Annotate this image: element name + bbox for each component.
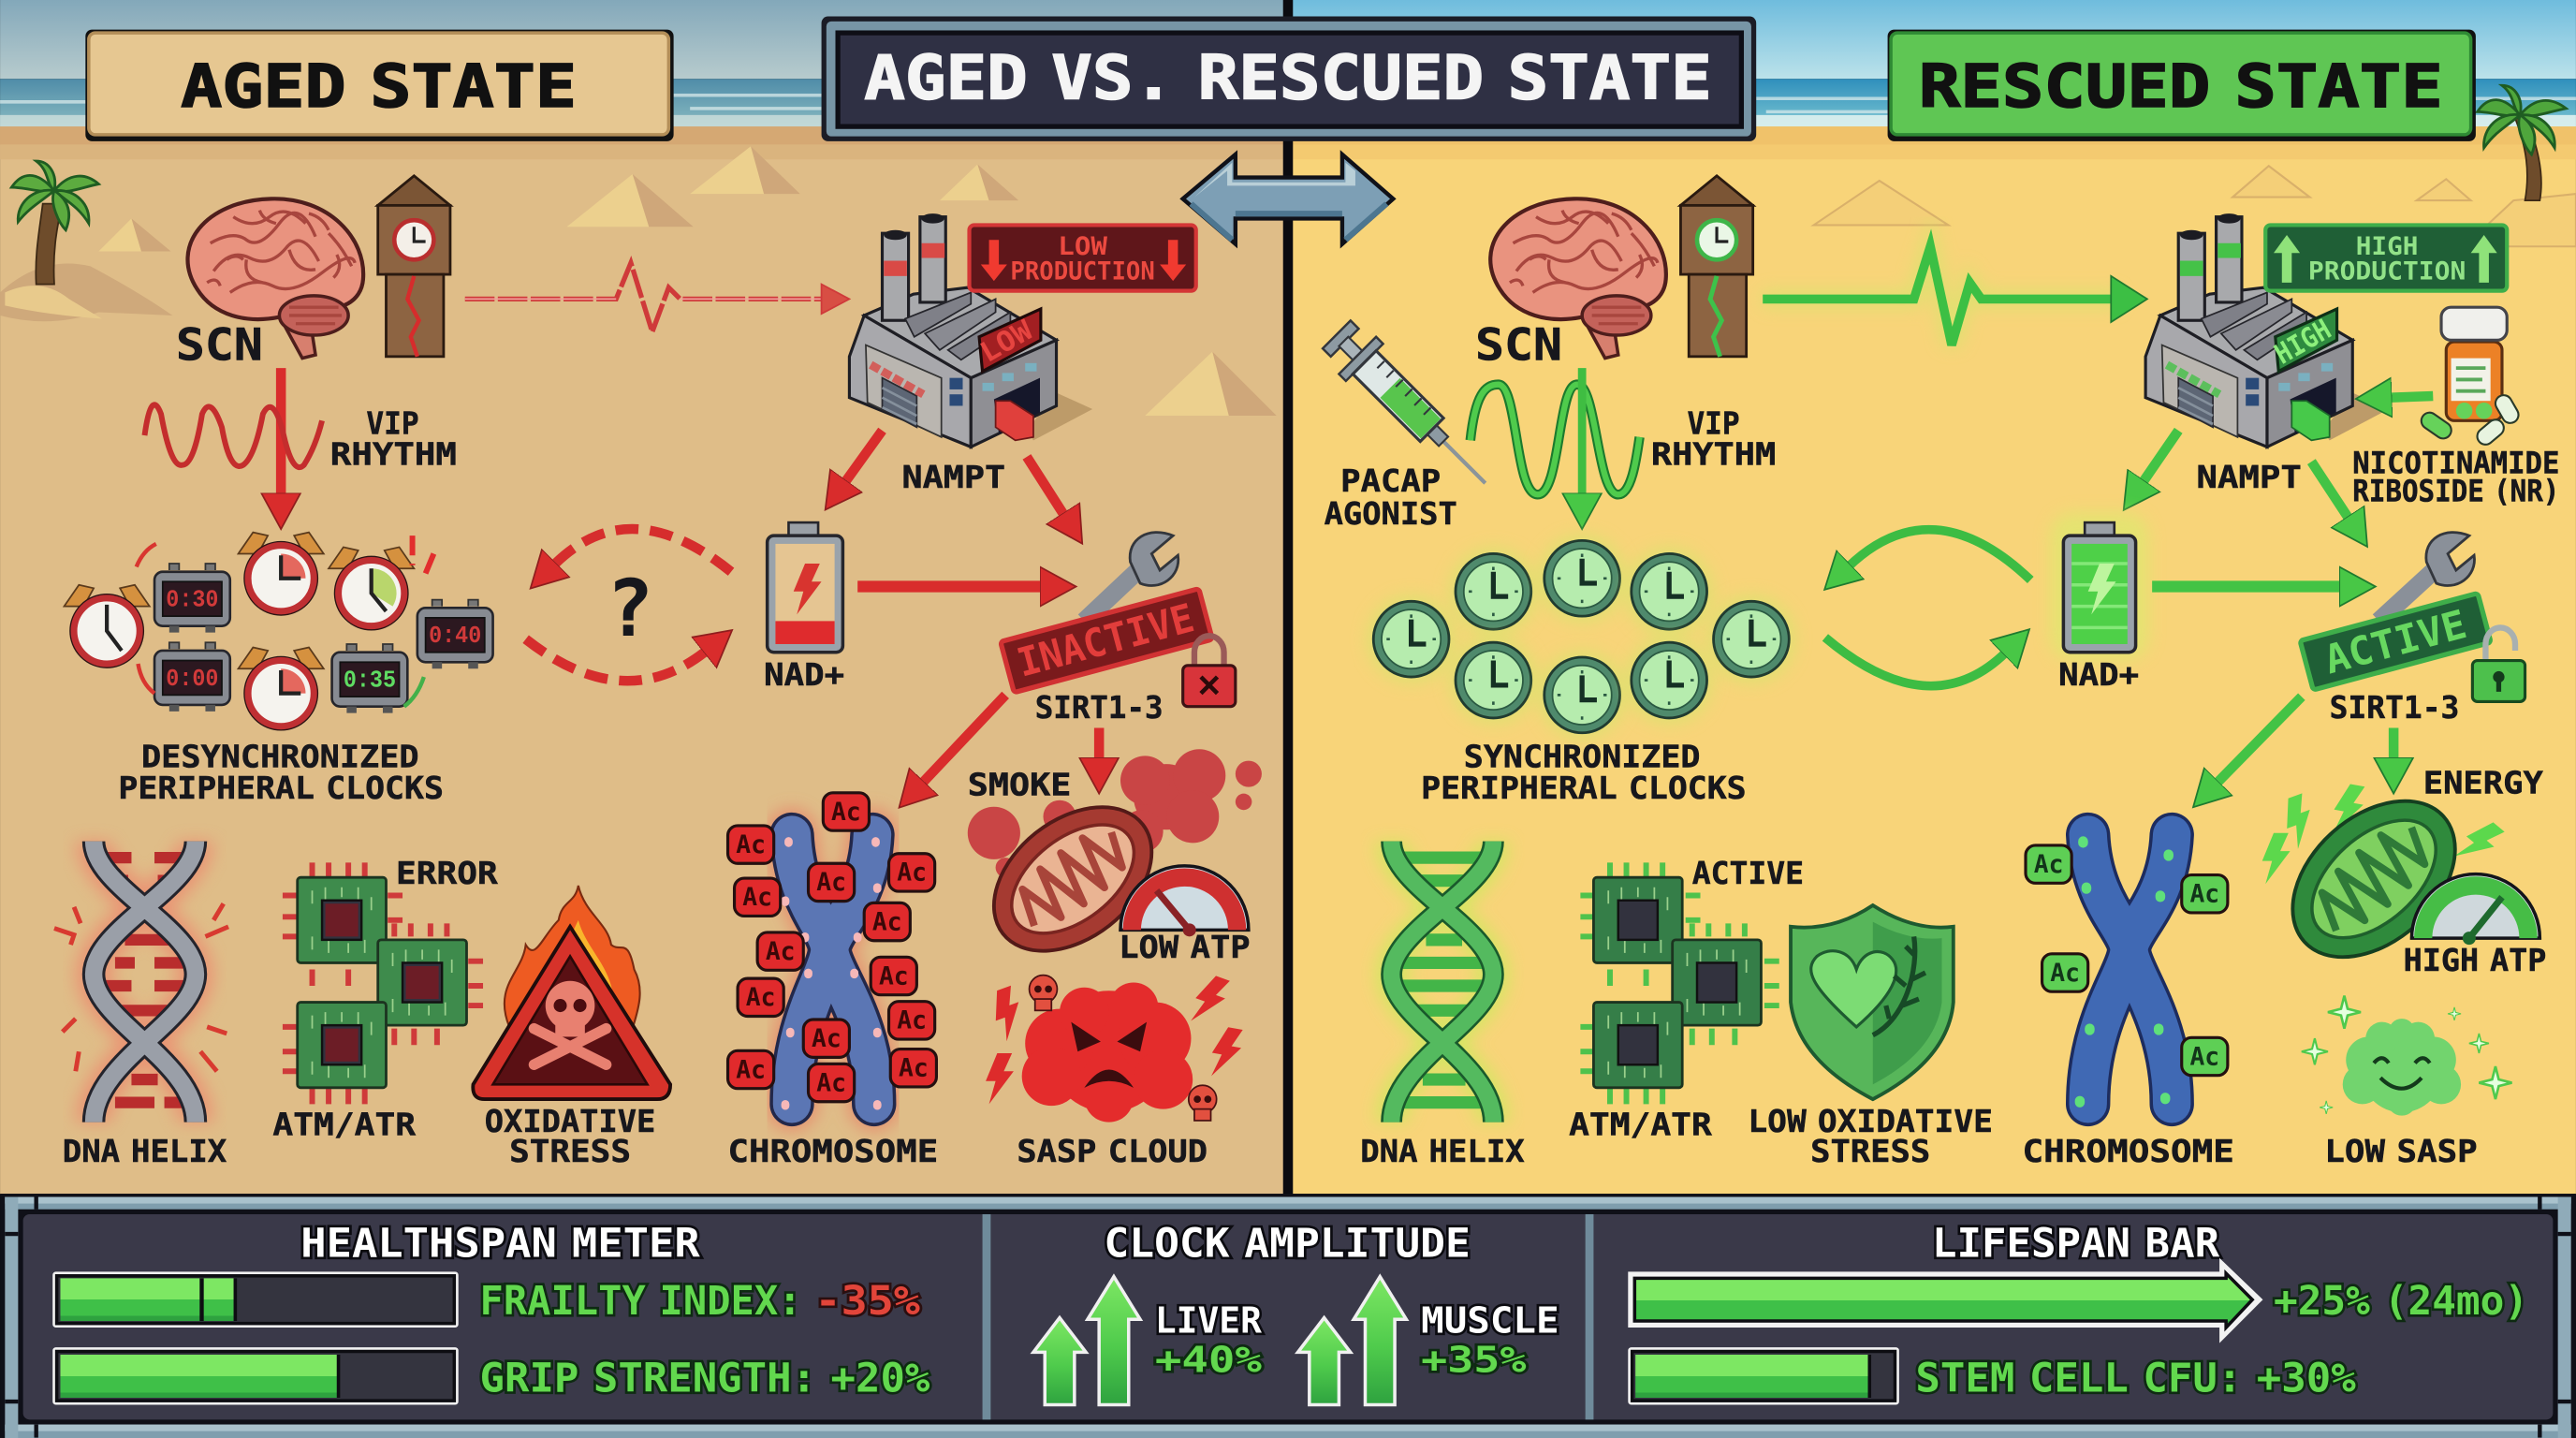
icon: desynchronized peripheral clocks: 0:40 [429,622,481,650]
icon: healthy mitochondrion [2262,770,2506,988]
label: VIP rhythm [1651,404,1776,473]
sign: active [2300,594,2491,690]
icon: acetylated chromosome: Ac [816,869,846,897]
arrow: feedback loop top [1848,530,2030,580]
label: low oxidative stress: LOW OXIDATIVE [1748,1103,1993,1139]
section: clock amplitude [1033,1221,1559,1405]
label: chromosome: CHROMOSOME [728,1133,938,1169]
label: VIP rhythm: RHYTHM [330,436,457,473]
icon: high ATP gauge [2411,874,2539,945]
bar: grip strength [52,1347,459,1405]
bar: frailty index [52,1271,459,1328]
label: ATM/ATR: ATM/ATR [272,1107,417,1143]
label: smoke: SMOKE [968,766,1071,802]
bar: lifespan arrow [1630,1262,2261,1339]
label: DNA helix: DNA HELIX [63,1133,227,1169]
icon: low SASP cloud [2302,996,2511,1116]
label: oxidative stress: STRESS [509,1133,631,1169]
label: active: ACTIVE [1692,855,1804,891]
icon: protective shield [1791,905,1954,1099]
heading: rescued state sign: RESCUED STATE [1919,51,2443,121]
label: SIRT1-3: SIRT1-3 [2330,689,2459,726]
icon: nicotinamide riboside pill bottle [2418,307,2522,448]
label: muscle +35% [1421,1299,1559,1381]
sign: active: ACTIVE [2320,601,2471,682]
callout: low production [970,225,1196,291]
arrow: strong pulse to NAMPT [1763,246,2147,345]
label: muscle +35%: MUSCLE [1421,1299,1559,1342]
label: NAD+: NAD+ [764,656,844,693]
section: lifespan bar [1628,1221,2528,1405]
centre divider [1283,0,1293,1196]
arrow: SCN to clocks [278,368,284,496]
label: ATM/ATR: ATM/ATR [1569,1107,1713,1143]
sign: inactive: INACTIVE [1012,594,1199,686]
icon: acetylated chromosome: Ac [746,984,775,1012]
callout: low production: PRODUCTION [1010,257,1155,286]
heading: aged state sign [85,30,674,141]
icon: smoke puffs [968,749,1262,877]
label: desynchronized peripheral clocks [118,739,444,806]
callout: high production: PRODUCTION [2308,257,2466,286]
label: error: ERROR [396,855,499,891]
label: grip strength: GRIP STRENGTH: +20% [480,1356,930,1402]
arrow: feedback loop bottom [1825,638,2006,686]
label: VIP rhythm [330,404,457,473]
icon: clean chromosome: Ac [2189,881,2219,909]
arrow: weak pulse to NAMPT [465,263,849,332]
label: low oxidative stress: STRESS [1810,1133,1930,1169]
label: PACAP agonist: PACAP [1340,462,1441,499]
double-headed arrow [1183,154,1393,244]
label: low SASP: LOW SASP [2324,1133,2478,1169]
title: aged vs rescued state [822,17,1756,141]
chart: strong VIP rhythm wave [1471,385,1640,494]
arrow: SIRT to chromosome [2217,697,2302,784]
label: lifespan gain: +25% (24mo) [2274,1278,2528,1325]
label: nicotinamide riboside [2352,447,2559,508]
label: frailty index: -35% [815,1278,920,1325]
arrow: NAMPT to NAD+ [2143,431,2178,483]
label: oxidative stress [485,1103,655,1169]
arrow: broken loop bottom [526,639,707,681]
label: synchronized peripheral clocks: SYNCHRONIZED [1464,739,1701,775]
icon: liver amplitude arrows [1033,1277,1140,1405]
icon: acetylated chromosome: Ac [816,1069,846,1097]
label: low ATP: LOW ATP [1119,929,1251,965]
panel: rescued state [1318,176,2559,1169]
heading: aged state sign: AGED STATE [181,51,577,121]
icon: clean chromosome: Ac [2189,1043,2219,1071]
label: nicotinamide riboside: RIBOSIDE (NR) [2352,475,2559,508]
icon: healthy DNA helix [1392,842,1493,1123]
icon: acetylated chromosome [728,793,936,1106]
icon: clean chromosome [2026,835,2228,1104]
label: high ATP: HIGH ATP [2404,942,2546,978]
palm tree right [2478,85,2566,200]
icon: damaged DNA helix [54,842,228,1123]
title: aged vs rescued state: AGED VS. RESCUED STATE [864,43,1712,113]
label: low oxidative stress [1748,1103,1993,1169]
heading: lifespan bar: LIFESPAN BAR [1932,1221,2219,1268]
icon: acetylated chromosome: Ac [812,1025,842,1053]
panel: metrics dashboard [0,1194,2576,1438]
label: VIP rhythm: RHYTHM [1651,436,1776,473]
icon: desynchronized peripheral clocks: 0:00 [166,665,218,693]
label: frailty index: FRAILTY INDEX: [480,1278,802,1325]
label: synchronized peripheral clocks [1421,739,1747,806]
icon: desynchronized peripheral clocks: 0:35 [344,667,396,695]
sign: low: LOW [974,314,1038,370]
icon: acetylated chromosome: Ac [742,884,772,912]
label: DNA helix: DNA HELIX [1360,1133,1525,1169]
label: liver +40% [1155,1299,1263,1381]
icon: healthy grandfather clock [1680,176,1753,357]
label: desynchronized peripheral clocks: PERIPHERAL CLOCKS [118,770,444,806]
icon: aged grandfather clock [378,176,450,357]
icon: PACAP syringe [1318,315,1504,502]
label: energy: ENERGY [2423,765,2543,801]
label: SCN: SCN [1475,319,1562,371]
section: healthspan meter [52,1221,930,1405]
arrow: SCN to clocks [1580,368,1585,496]
label: PACAP agonist: AGONIST [1325,495,1457,532]
callout: high production [2265,225,2507,291]
label: nicotinamide riboside: NICOTINAMIDE [2352,447,2559,480]
icon: acetylated chromosome: Ac [766,938,796,966]
bar: stem cell CFU [1628,1347,1899,1405]
icon: acetylated chromosome: Ac [899,1055,929,1083]
label: VIP rhythm: VIP [1687,404,1740,441]
icon: open lock [2472,627,2525,701]
icon: acetylated chromosome: Ac [897,859,927,888]
arrow: SIRT to chromosome [922,695,1005,784]
icon: wrench [2378,533,2474,621]
label: stem cell CFU: STEM CELL CFU: +30% [1915,1356,2356,1402]
icon: error chips [283,862,483,1104]
panel: aged state [54,176,1262,1169]
arrow: NAMPT to SIRT [2311,462,2349,520]
palm tree left [11,161,98,285]
icon: low ATP gauge [1120,866,1249,936]
callout: high production: HIGH [2356,233,2418,261]
heading: clock amplitude: CLOCK AMPLITUDE [1104,1221,1471,1268]
heading: rescued state sign [1888,30,2476,141]
icon: aged brain [187,198,363,359]
icon: acetylated chromosome: Ac [872,908,902,936]
icon: low NAD+ battery [768,522,842,653]
icon: desynchronized peripheral clocks [65,533,493,729]
arrow: NAD+ to SIRT [2152,583,2343,590]
icon: wrench [1084,533,1178,621]
label: desynchronized peripheral clocks: DESYNCHRONIZED [141,739,419,775]
icon: damaged mitochondrion [967,778,1179,980]
label: SCN: SCN [176,319,263,371]
icon: acetylated chromosome: Ac [736,831,766,859]
label: PACAP agonist [1325,462,1457,532]
arrow: NAMPT to NAD+ [844,431,883,483]
label: oxidative stress: OXIDATIVE [485,1103,655,1139]
icon: oxidative stress warning [473,886,670,1099]
icon: acetylated chromosome: Ac [879,962,909,990]
arrow: NAD+ to SIRT [857,583,1044,590]
icon: SASP cloud [986,972,1244,1123]
arrow: broken loop top [554,529,731,572]
arrow: SIRT to mitochondrion [2391,727,2396,761]
icon: healthy brain [1490,198,1666,359]
icon: healthy factory [2145,213,2389,447]
icon: full NAD+ battery [2050,513,2149,661]
icon: question mark: ? [607,563,653,654]
icon: synchronized peripheral clocks [1367,534,1795,740]
arrow: NR to factory [2389,396,2433,398]
callout: low production: LOW [1058,233,1107,261]
label: muscle +35%: +35% [1421,1339,1526,1381]
label: chromosome: CHROMOSOME [2022,1133,2234,1169]
icon: desynchronized peripheral clocks: 0:30 [166,586,218,614]
icon: muscle amplitude arrows [1298,1277,1406,1405]
chart: irregular VIP rhythm wave [145,404,322,467]
icon: clean chromosome: Ac [2034,851,2063,879]
label: NAMPT: NAMPT [902,459,1005,495]
label: NAMPT: NAMPT [2197,459,2302,495]
icon: closed lock [1183,636,1236,707]
label: SASP cloud: SASP CLOUD [1017,1133,1208,1169]
label: liver +40%: +40% [1155,1339,1262,1381]
icon: aged factory [849,213,1092,447]
heading: healthspan meter: HEALTHSPAN METER [300,1221,700,1268]
label: VIP rhythm: VIP [366,404,419,441]
icon: acetylated chromosome: Ac [831,799,861,827]
icon: acetylated chromosome: Ac [897,1007,927,1035]
icon: active chips [1580,862,1779,1104]
chart line highlight [1471,385,1640,494]
arrow: SIRT to mitochondrion [1096,727,1102,761]
label: synchronized peripheral clocks: PERIPHERAL CLOCKS [1421,770,1747,806]
label: SIRT1-3: SIRT1-3 [1035,689,1164,726]
icon: acetylated chromosome: Ac [736,1056,766,1084]
icon: clean chromosome: Ac [2050,960,2080,988]
label: NAD+: NAD+ [2058,656,2139,693]
label: liver +40%: LIVER [1155,1299,1263,1342]
arrow: NAMPT to SIRT [1027,457,1064,516]
sign: high: HIGH [2269,314,2337,372]
